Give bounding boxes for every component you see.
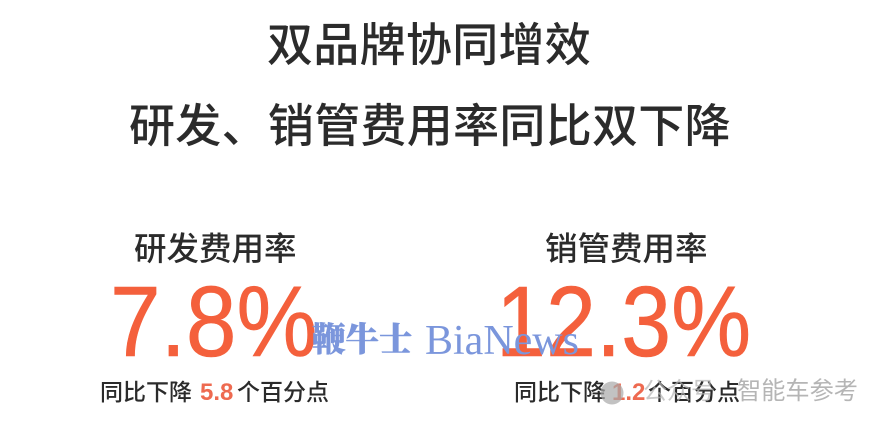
change note: R&D: 个百分点 xyxy=(237,379,329,405)
change note: sales and admin xyxy=(514,379,740,406)
watermark: BiaNews xyxy=(312,318,579,364)
big number: 12.3%: 12.3% xyxy=(496,266,751,378)
watermark: WeChat account xyxy=(600,378,858,405)
panel: sales and admin expense ratio xyxy=(496,231,751,406)
label: official account: 公众号 xyxy=(643,378,715,405)
change note: sales and admin: 同比下降 xyxy=(514,379,606,405)
change note: R&D xyxy=(100,379,329,406)
watermark Latin name: BiaNews xyxy=(425,318,579,364)
change note: sales and admin: 1.2 xyxy=(612,379,645,406)
title line 1: 双品牌协同增效 xyxy=(267,19,591,71)
icon: WeChat xyxy=(600,382,624,404)
big number: 7.8%: 7.8% xyxy=(110,266,317,378)
heading: R&D: 研发费用率 xyxy=(134,231,297,267)
heading: sales and admin: 销管费用率 xyxy=(545,231,708,267)
panel: R&D expense ratio xyxy=(100,231,329,406)
change note: R&D: 5.8 xyxy=(200,379,233,406)
title line 2: 研发、销管费用率同比双下降 xyxy=(129,100,731,152)
change note: R&D: 同比下降 xyxy=(100,379,192,405)
account name: 智能车参考 xyxy=(737,378,858,405)
change note: sales and admin: 个百分点 xyxy=(648,379,740,405)
watermark Chinese name: 鞭牛士 xyxy=(312,322,412,359)
